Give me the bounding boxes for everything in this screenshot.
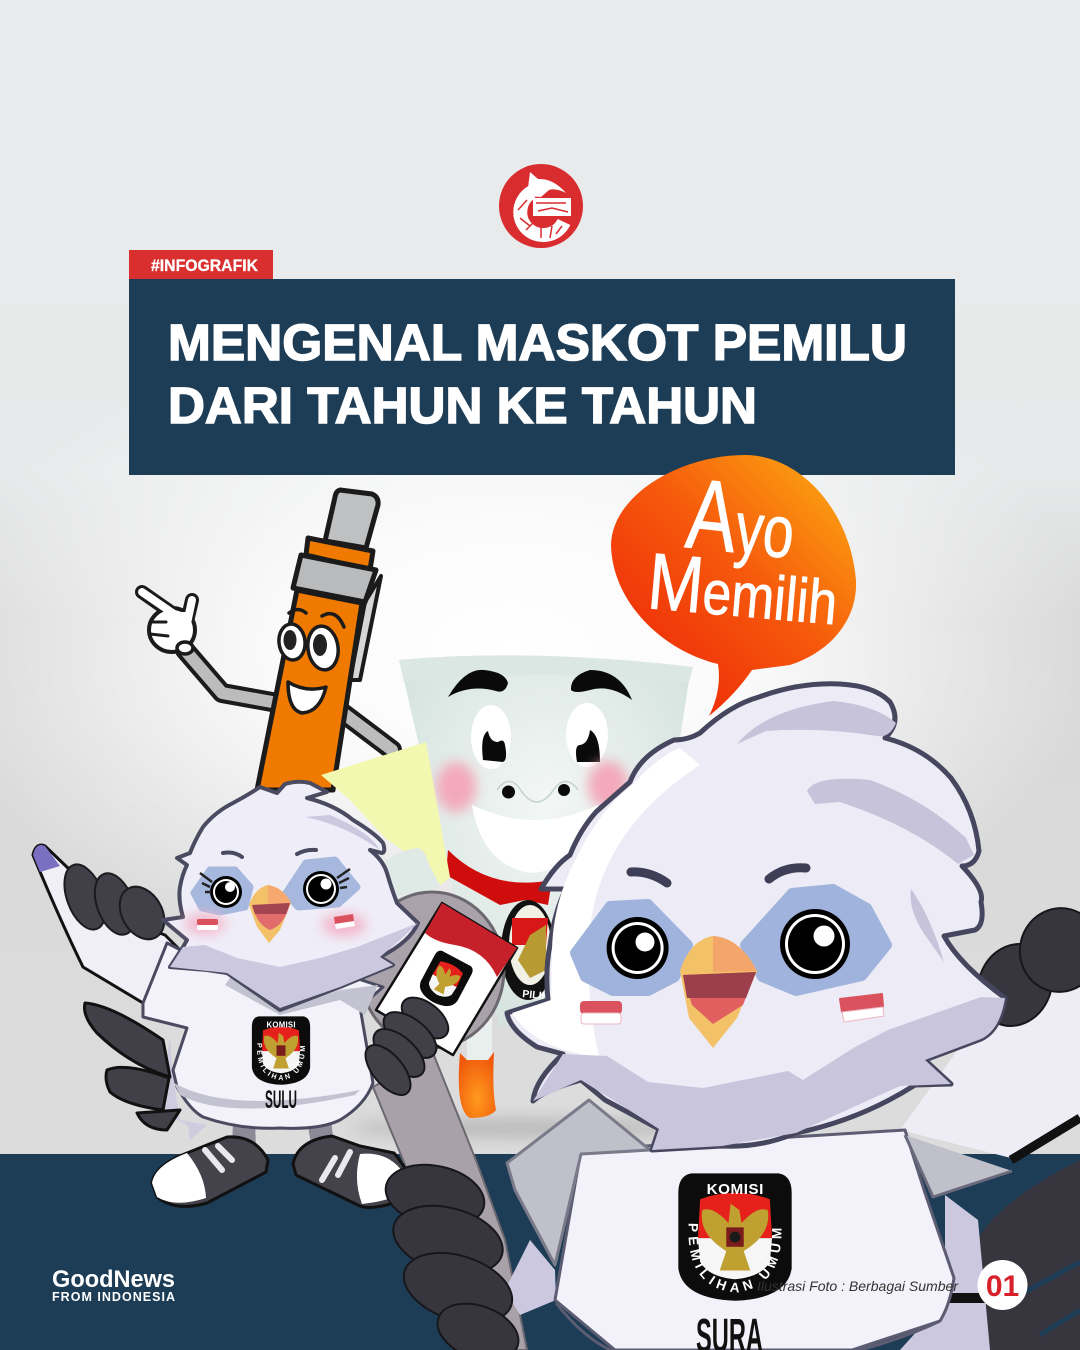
box hand xyxy=(385,848,440,895)
title panel xyxy=(129,279,955,475)
sulu legs xyxy=(232,1120,334,1150)
flag emblem xyxy=(415,949,475,1012)
box body xyxy=(399,655,693,1026)
sura right arm xyxy=(900,960,1080,1158)
box eyebrows xyxy=(448,670,632,700)
box smile xyxy=(472,805,598,873)
sulu raised glove xyxy=(56,859,173,947)
mascot: ballot box (Si Kora) xyxy=(321,655,693,1137)
sulu crest shading xyxy=(305,815,380,850)
ballot paper xyxy=(321,742,450,885)
sura large wing arc behind xyxy=(360,892,504,1048)
sura wing stripe xyxy=(1011,1118,1080,1160)
title text: DARI TAHUN KE TAHUN xyxy=(168,377,757,434)
box cheeks xyxy=(436,761,628,812)
sulu shirt logo: KOMISI xyxy=(266,1020,296,1029)
pen left arm xyxy=(185,650,272,702)
title text: MENGENAL MASKOT PEMILU xyxy=(168,314,907,371)
sura cheek flags xyxy=(580,994,884,1024)
page number xyxy=(978,1260,1028,1310)
sura fluff xyxy=(533,997,1005,1150)
title text xyxy=(168,314,907,434)
ground shadow xyxy=(350,1119,690,1137)
sura right glove xyxy=(965,899,1080,1038)
sulu cheek flags xyxy=(197,914,355,930)
sura dark feathers xyxy=(977,1160,1080,1350)
sulu raised arm xyxy=(33,845,180,1003)
sulu shirt xyxy=(143,943,383,1128)
sura stick xyxy=(373,1053,527,1350)
sulu wing feathers xyxy=(84,1003,207,1140)
box badge xyxy=(501,900,565,1004)
tag: #INFOGRAFIK: #INFOGRAFIK xyxy=(151,257,258,275)
sulu fluff xyxy=(170,923,418,1008)
tag: #INFOGRAFIK xyxy=(129,250,273,279)
sulu holding glove xyxy=(357,990,456,1103)
sura crest xyxy=(737,701,896,744)
caption: Ilustrasi Foto : Berbagai Sumber xyxy=(757,1278,959,1294)
sura navy feather gaps xyxy=(1025,1262,1080,1335)
sura shirt logo: PEMILIHAN UMUM xyxy=(688,1224,782,1292)
box scarf xyxy=(446,850,552,905)
sura eyes xyxy=(607,909,850,979)
sura black wing line xyxy=(935,1293,985,1303)
pen right arm xyxy=(339,710,392,750)
pen hand pointing xyxy=(142,592,195,654)
pen body xyxy=(257,590,362,790)
sura sleeve left xyxy=(507,1100,650,1265)
mascot: SULU: SULU xyxy=(265,1086,297,1114)
sulu shirt logo xyxy=(252,1016,310,1085)
speech bubble: Ayo Memilih: Ayo xyxy=(682,457,801,580)
mascot: SURA xyxy=(384,681,1080,1350)
speech bubble: Ayo Memilih: Memilih xyxy=(645,536,842,641)
sulu shirt logo: PEMILIHAN UMUM xyxy=(257,1043,305,1080)
sura sleeve right xyxy=(905,1135,1012,1197)
pen cap xyxy=(325,490,378,548)
sura beak xyxy=(680,936,757,1048)
sura eyebrows xyxy=(631,868,806,883)
pen collar xyxy=(306,538,373,570)
box leg and boot xyxy=(459,1015,496,1118)
logo: GNFI red circle with eagle G xyxy=(499,164,583,248)
box eyes xyxy=(471,703,608,769)
sulu beak xyxy=(249,885,291,943)
sulu eye mask xyxy=(194,860,357,912)
sura shirt logo xyxy=(678,1173,792,1301)
speech bubble: Ayo Memilih xyxy=(611,455,856,716)
sura shirt hem xyxy=(556,1303,940,1350)
box rim xyxy=(399,655,693,682)
box badge: PILIHAN xyxy=(522,988,565,1004)
sulu shirt shadow xyxy=(174,975,378,1108)
sura shirt body xyxy=(555,1130,954,1350)
pen face xyxy=(277,610,344,713)
page number: 01 xyxy=(986,1270,1019,1303)
mascot: SULU xyxy=(32,780,528,1350)
sura mask xyxy=(575,889,887,991)
sura side shade xyxy=(911,889,944,962)
box nose xyxy=(497,781,578,802)
sura white edge xyxy=(512,748,700,1060)
sulu eyes xyxy=(200,850,350,908)
sura shirt logo: KOMISI xyxy=(707,1181,763,1198)
sulu shoes xyxy=(152,1136,410,1207)
sura lavender hip xyxy=(900,1195,990,1350)
sulu ballot flag xyxy=(376,903,517,1055)
brand: GoodNews from Indonesia: FROM INDONESIA xyxy=(52,1290,175,1304)
sulu blush xyxy=(185,914,366,936)
sura feather shade xyxy=(807,779,974,864)
sulu head xyxy=(163,782,418,1010)
sura glove left xyxy=(380,1156,526,1350)
brand: GoodNews from Indonesia: GoodNews xyxy=(52,1266,175,1293)
sulu finger ink xyxy=(33,845,60,872)
bottom navy band xyxy=(0,1154,1080,1350)
sura sleeve edge xyxy=(905,1135,1012,1197)
mascot: pen (Si Pena) xyxy=(142,490,392,790)
pen clip xyxy=(350,576,381,680)
pen band xyxy=(293,555,376,602)
sura head xyxy=(507,684,1005,1150)
sura lavender side xyxy=(505,1240,556,1315)
